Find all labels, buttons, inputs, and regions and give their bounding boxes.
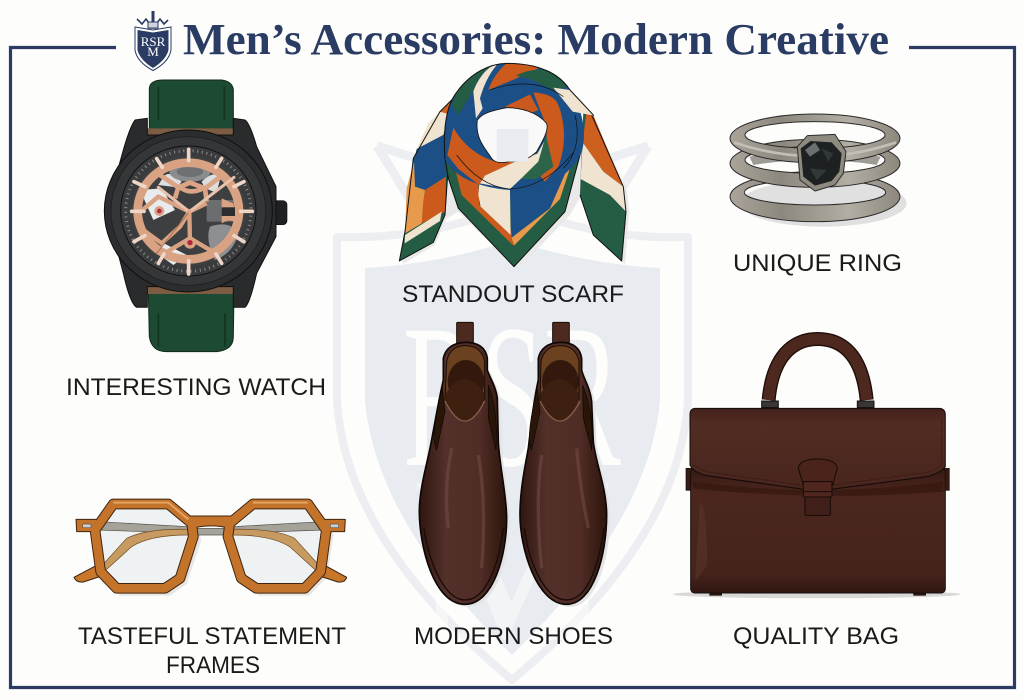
middle band bbox=[730, 139, 900, 187]
label: quality bag: QUALITY BAG bbox=[733, 623, 899, 650]
clasp bbox=[798, 459, 837, 485]
icon: chelsea boots bbox=[419, 322, 610, 607]
frame front outline bbox=[95, 504, 326, 588]
label: tasteful statement frames bbox=[78, 623, 346, 679]
icon: glasses bbox=[74, 503, 347, 596]
icon: briefcase bbox=[673, 339, 961, 598]
icon: scarf bbox=[399, 63, 629, 270]
skeleton openings bbox=[158, 174, 221, 193]
label: standout scarf: STANDOUT SCARF bbox=[402, 281, 624, 308]
neck opening bbox=[477, 108, 547, 162]
bag shadow bbox=[673, 590, 961, 598]
item: unique ring bbox=[730, 114, 907, 277]
icon: brand crest: M bbox=[147, 44, 159, 59]
left boot bbox=[419, 322, 507, 604]
lens shadow bbox=[96, 505, 334, 596]
lower band bbox=[730, 172, 900, 222]
item: quality bag bbox=[673, 339, 961, 650]
scarf shadow bbox=[403, 102, 629, 270]
icon: brand crest bbox=[135, 11, 171, 70]
right tail bbox=[580, 110, 626, 261]
lenses bbox=[95, 504, 193, 588]
heading: Men’s Accessories: Modern Creative bbox=[183, 15, 889, 64]
bag body bbox=[691, 468, 945, 593]
boot shadow bbox=[423, 373, 610, 607]
label: tasteful statement frames: TASTEFUL STATEMENT bbox=[78, 623, 346, 650]
label: modern shoes: MODERN SHOES bbox=[414, 623, 613, 650]
front drape bbox=[445, 145, 583, 267]
item: tasteful statement frames bbox=[74, 503, 347, 679]
stone setting bbox=[797, 134, 846, 191]
label: unique ring: UNIQUE RING bbox=[733, 250, 902, 277]
top band bbox=[730, 114, 900, 163]
neck loop bands bbox=[452, 64, 493, 115]
watermark: brand shield: RSR bbox=[403, 283, 621, 510]
flap bbox=[690, 408, 945, 489]
watermark: brand shield: M bbox=[410, 426, 615, 692]
right boot bbox=[520, 322, 607, 604]
item: standout scarf bbox=[399, 63, 629, 308]
end pieces bbox=[76, 516, 345, 532]
watermark: brand shield bbox=[337, 116, 688, 692]
left tail bbox=[399, 97, 455, 261]
watch hands bbox=[158, 177, 234, 212]
rose gold skeleton bbox=[138, 163, 239, 259]
neck loop base bbox=[444, 63, 584, 190]
temples bbox=[98, 522, 323, 535]
hour indices bbox=[132, 149, 252, 274]
frame front bbox=[95, 504, 326, 588]
icon: brand crest: RSR bbox=[141, 34, 166, 49]
label: interesting watch: INTERESTING WATCH bbox=[66, 374, 326, 401]
icon: watch bbox=[104, 80, 287, 352]
handle bbox=[769, 339, 867, 400]
bag feet bbox=[709, 592, 722, 596]
label: tasteful statement frames: FRAMES bbox=[166, 652, 260, 679]
ring shadow bbox=[740, 180, 907, 227]
title block bbox=[135, 11, 889, 70]
side tabs bbox=[686, 468, 692, 490]
icon: ring bbox=[730, 114, 907, 227]
item: modern shoes bbox=[414, 322, 613, 650]
item: interesting watch bbox=[66, 80, 326, 401]
temple tips bbox=[74, 565, 102, 582]
